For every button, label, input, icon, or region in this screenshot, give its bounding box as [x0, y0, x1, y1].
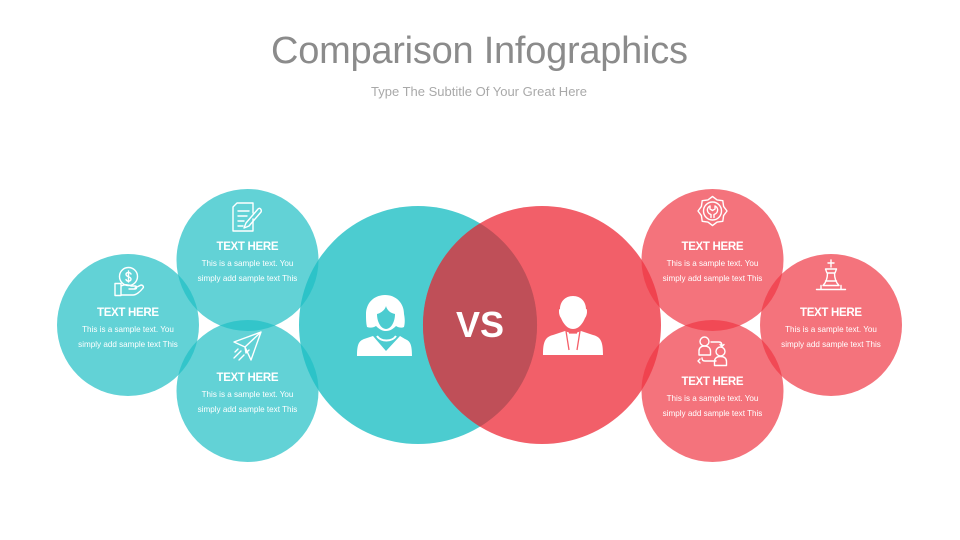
panel: red right circle	[760, 254, 902, 396]
panel: right main circle	[423, 206, 661, 444]
body text: This is a sample text. You	[785, 325, 877, 334]
body text: simply add sample text This	[198, 405, 297, 414]
title: Comparison Infographics	[271, 30, 688, 72]
body text: This is a sample text. You	[667, 259, 758, 268]
body text: This is a sample text. You	[202, 259, 293, 268]
panel: teal top circle	[176, 189, 318, 331]
heading: TEXT HERE	[682, 241, 744, 253]
icon: chess king	[816, 260, 846, 290]
icon: document and pen	[233, 203, 261, 231]
body text: This is a sample text. You	[202, 390, 293, 399]
body text: simply add sample text This	[198, 274, 297, 283]
body text: This is a sample text. You	[82, 325, 174, 334]
body text: This is a sample text. You	[667, 394, 758, 403]
heading: TEXT HERE	[800, 307, 862, 319]
icon: hand with coin	[115, 268, 143, 296]
subtitle: Type The Subtitle Of Your Great Here	[371, 84, 587, 99]
body text: simply add sample text This	[663, 409, 762, 418]
icon: businessman	[543, 296, 603, 355]
panel: red top circle	[642, 189, 784, 331]
icon: gear with wrench	[698, 196, 727, 226]
body text: simply add sample text This	[781, 340, 881, 349]
VS label: VS	[456, 304, 504, 345]
body text: simply add sample text This	[78, 340, 178, 349]
icon: two people exchanging	[698, 337, 726, 366]
heading: TEXT HERE	[682, 376, 744, 388]
icon: woman	[357, 295, 412, 356]
heading: TEXT HERE	[216, 372, 279, 384]
center overlap	[423, 223, 537, 427]
panel: teal left circle	[57, 254, 199, 396]
icon: paper plane	[234, 332, 261, 360]
panel: teal bottom circle	[176, 320, 318, 462]
heading: TEXT HERE	[216, 241, 279, 253]
heading: TEXT HERE	[97, 307, 159, 319]
body text: simply add sample text This	[663, 274, 762, 283]
panel: left main circle	[299, 206, 537, 444]
panel: red bottom circle	[642, 320, 784, 462]
